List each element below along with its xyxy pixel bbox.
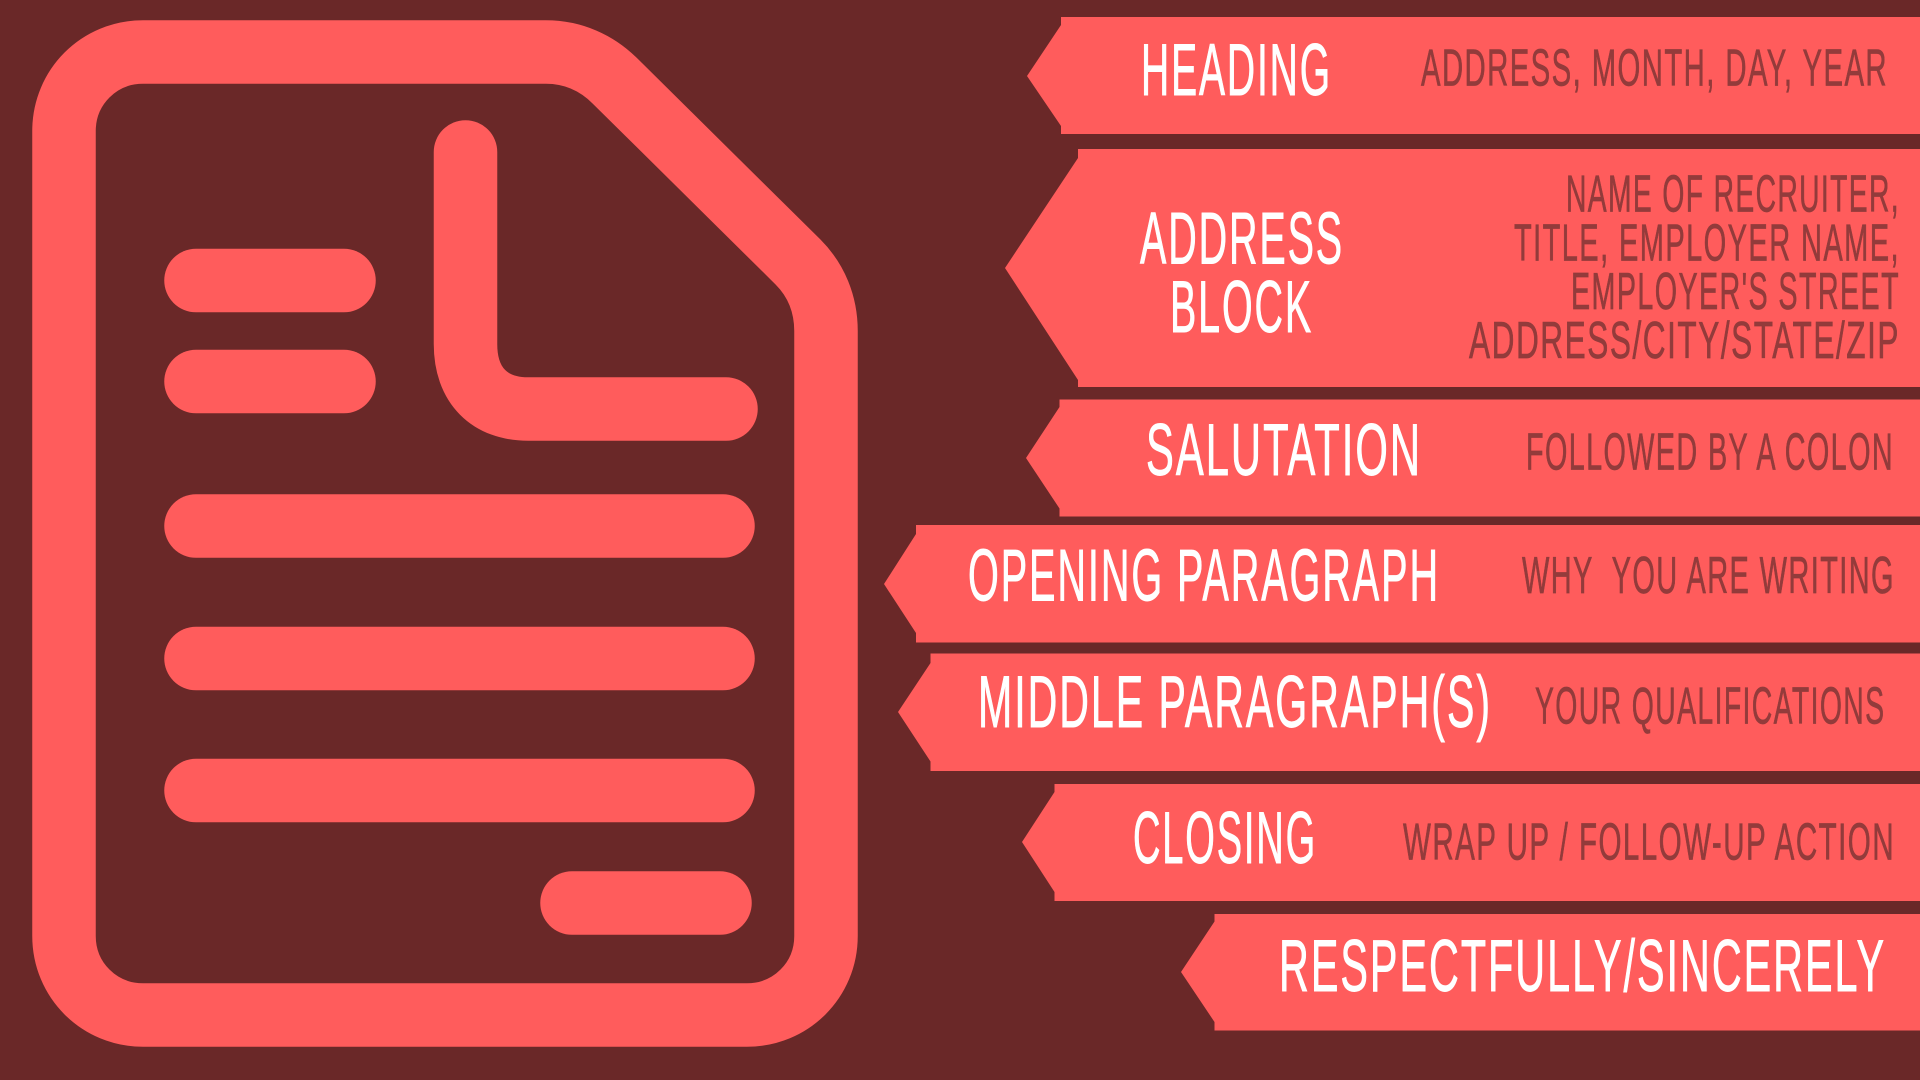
ribbon shape	[898, 654, 1920, 771]
icon: document	[64, 52, 826, 1015]
ribbon: salutation	[1026, 400, 1920, 516]
label: address: ADDRESS	[1140, 198, 1344, 280]
document outline	[64, 52, 826, 1015]
ribbon shape	[884, 525, 1920, 642]
ribbon: address block	[1005, 149, 1920, 387]
text line 2	[196, 627, 723, 690]
ribbon shape	[1027, 17, 1920, 134]
ribbon shape	[1026, 400, 1920, 516]
address line 1	[196, 249, 344, 312]
label: closing: CLOSING	[1133, 798, 1317, 879]
ribbon: closing	[1022, 784, 1920, 901]
ribbon shape	[1181, 914, 1920, 1030]
ribbon: sign-off	[1181, 914, 1920, 1030]
label: middle paragraphs: MIDDLE PARAGRAPH(S)	[978, 662, 1492, 743]
ribbon: opening paragraph	[884, 525, 1920, 642]
signature line	[572, 871, 720, 935]
label: opening paragraph: OPENING PARAGRAPH	[968, 536, 1440, 616]
text line 1	[196, 494, 723, 558]
address line 2	[196, 350, 344, 413]
label: heading: HEADING	[1141, 30, 1332, 111]
label: block: BLOCK	[1170, 267, 1313, 348]
ribbon: middle paragraphs	[898, 654, 1920, 771]
folded L-shaped mark	[466, 152, 726, 409]
ribbon: heading	[1027, 17, 1920, 134]
label: salutation: SALUTATION	[1146, 410, 1422, 491]
text line 3	[196, 759, 723, 822]
ribbon shape	[1022, 784, 1920, 901]
ribbon shape	[1005, 149, 1920, 387]
